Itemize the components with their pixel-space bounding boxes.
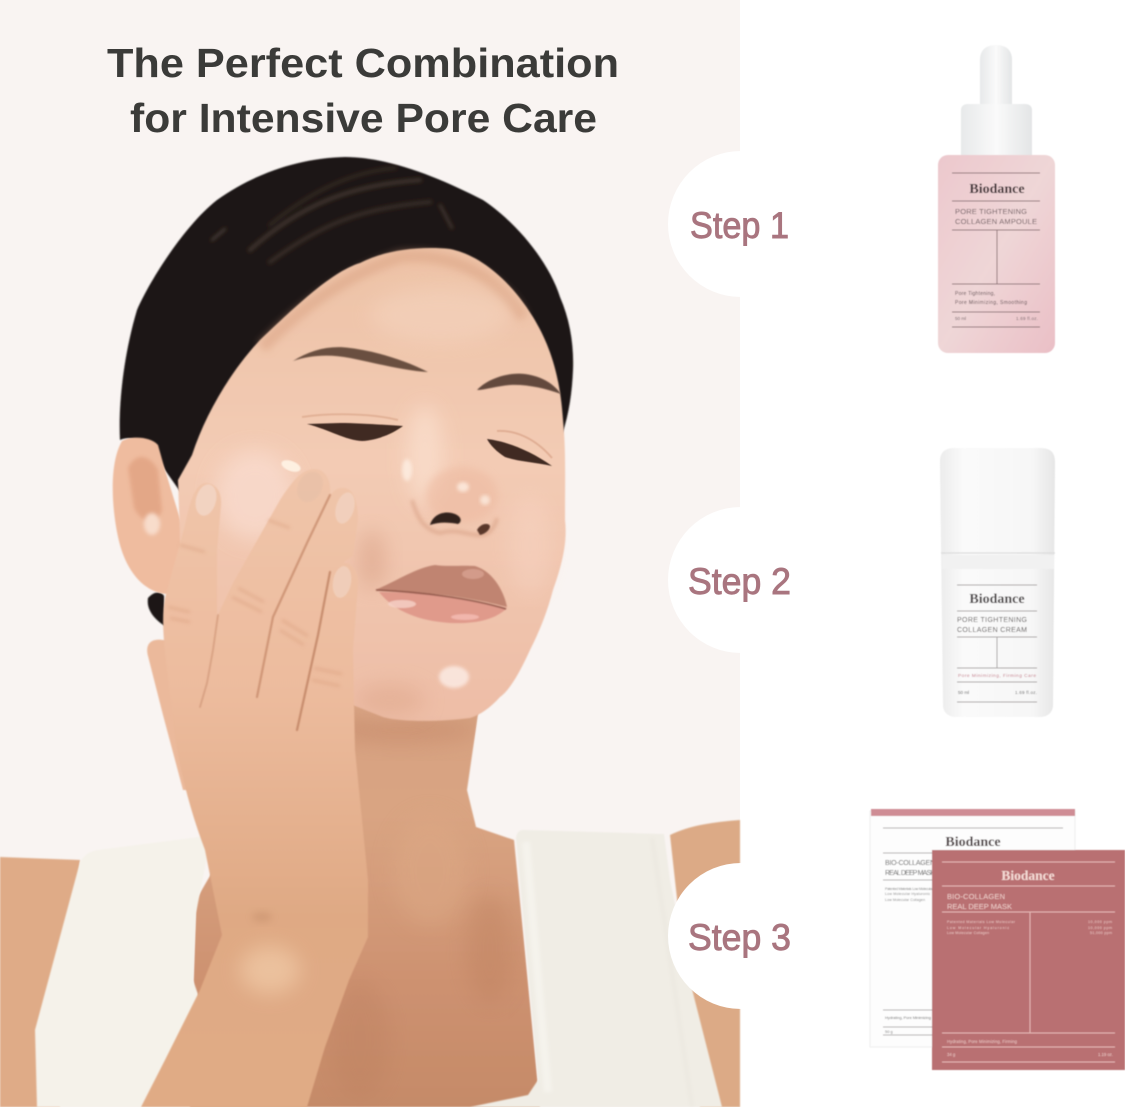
product: bio-collagen real deep mask: 50 g xyxy=(885,1029,893,1034)
knuckle creases xyxy=(168,520,342,686)
step 2 badge xyxy=(668,507,814,653)
product: bio-collagen real deep mask: Low Molecular Hyaluronic xyxy=(947,926,1009,930)
right eyebrow xyxy=(477,374,561,394)
label text: Biodance xyxy=(969,182,1025,197)
right eye xyxy=(487,431,552,466)
sachet lines xyxy=(942,862,1115,1062)
product: bio-collagen real deep mask: Patented Materials Low Molecular xyxy=(947,920,1016,924)
product: bio-collagen real deep mask: BIO-COLLAGEN xyxy=(947,892,1005,901)
product: bio-collagen real deep mask: Low Molecular Collagen xyxy=(947,931,989,935)
dropper bulb xyxy=(980,45,1012,104)
jar body xyxy=(940,448,1055,717)
product: pore tightening collagen cream: 1.69 fl.oz. xyxy=(1015,690,1037,695)
product: bio-collagen real deep mask xyxy=(870,809,1125,1070)
woman's body and shoulders xyxy=(0,690,740,1107)
tank top strap folds xyxy=(526,838,692,1107)
bottle body xyxy=(938,155,1055,353)
finger nails xyxy=(192,467,358,599)
step 1 badge: Step 1 xyxy=(690,205,789,246)
title xyxy=(107,40,619,141)
hair xyxy=(120,157,573,520)
step 3 badge xyxy=(668,863,814,1009)
finger separations xyxy=(200,495,330,730)
jar seam xyxy=(941,552,1055,554)
face xyxy=(178,248,566,721)
title: for Intensive Pore Care xyxy=(130,95,597,141)
product: bio-collagen real deep mask: Low Molecular Collagen xyxy=(885,898,925,902)
product: pore tightening collagen ampoule: COLLAGEN AMPOULE xyxy=(955,217,1037,226)
hand and forearm xyxy=(141,467,368,1107)
product: pore tightening collagen ampoule: 1.69 fl.oz. xyxy=(1016,316,1038,321)
product: bio-collagen real deep mask: 10,000 ppm xyxy=(1088,926,1112,930)
cream tank top xyxy=(35,830,722,1107)
product: bio-collagen real deep mask: Hydrating, Pore Minimizing xyxy=(885,1015,931,1020)
product: bio-collagen real deep mask: Low Molecular Hyaluronic xyxy=(885,892,930,896)
product: pore tightening collagen ampoule: 50 ml xyxy=(955,316,966,321)
photo panel: woman applying product xyxy=(0,0,740,1107)
nose xyxy=(402,459,498,535)
product: pore tightening collagen cream: COLLAGEN CREAM xyxy=(957,627,1027,634)
cream dab on cheek xyxy=(280,458,302,474)
title: The Perfect Combination xyxy=(107,40,619,86)
product: pore tightening collagen ampoule: PORE TIGHTENING xyxy=(955,207,1027,216)
step 1 badge xyxy=(668,151,814,297)
product: pore tightening collagen cream: Pore Minimizing, Firming Care xyxy=(958,673,1036,679)
product: pore tightening collagen cream xyxy=(940,448,1055,717)
product: bio-collagen real deep mask: 1.19 oz. xyxy=(1098,1052,1113,1057)
left eye xyxy=(302,414,403,441)
thumb sliver behind hand xyxy=(147,640,205,790)
shadow beside nose and around mouth xyxy=(358,530,386,590)
box label text: Biodance xyxy=(945,835,1001,850)
product: bio-collagen real deep mask: Hydrating, Pore Minimizing, Firming xyxy=(947,1039,1018,1044)
product: pore tightening collagen ampoule: Pore Tightening, xyxy=(955,291,995,297)
panel background xyxy=(0,0,740,1107)
hair bun behind neck xyxy=(148,592,165,626)
step 2 badge: Step 2 xyxy=(688,561,791,602)
step 3 badge: Step 3 xyxy=(688,917,791,958)
product: pore tightening collagen ampoule: Pore Minimizing, Smoothing xyxy=(955,300,1027,306)
mask sachet xyxy=(932,850,1125,1070)
sachet text: Biodance xyxy=(1001,868,1055,883)
product: bio-collagen real deep mask: 10,000 ppm xyxy=(1088,920,1112,924)
cream dab on chin xyxy=(439,666,469,688)
label lines xyxy=(952,173,1040,327)
box label lines xyxy=(883,828,1063,1035)
hair shine strands xyxy=(212,168,452,262)
product: pore tightening collagen ampoule xyxy=(938,45,1055,353)
product: pore tightening collagen cream: 50 ml xyxy=(958,690,969,695)
forehead shade at hairline xyxy=(262,256,523,348)
product: pore tightening collagen cream: PORE TIGHTENING xyxy=(957,617,1027,624)
mask box xyxy=(870,811,1075,1047)
ear xyxy=(113,438,205,600)
left eyebrow xyxy=(293,347,428,372)
product: bio-collagen real deep mask: REAL DEEP MASK xyxy=(947,902,1012,911)
product: bio-collagen real deep mask: 34 g xyxy=(947,1052,956,1057)
arm shading and wrist bone highlight xyxy=(240,946,300,994)
soft glow on cheek xyxy=(215,450,295,540)
label text: Biodance xyxy=(969,592,1025,607)
lips xyxy=(375,565,507,623)
product: bio-collagen real deep mask: BIO-COLLAGEN xyxy=(885,860,935,867)
product: bio-collagen real deep mask: 51,000 ppm xyxy=(1090,931,1112,935)
dropper collar xyxy=(961,104,1032,158)
product: bio-collagen real deep mask: REAL DEEP MASK xyxy=(885,870,935,877)
product: bio-collagen real deep mask: Patented Materials Low Molecular xyxy=(885,887,934,891)
neck and chest shading xyxy=(355,720,504,960)
label lines xyxy=(957,585,1037,702)
